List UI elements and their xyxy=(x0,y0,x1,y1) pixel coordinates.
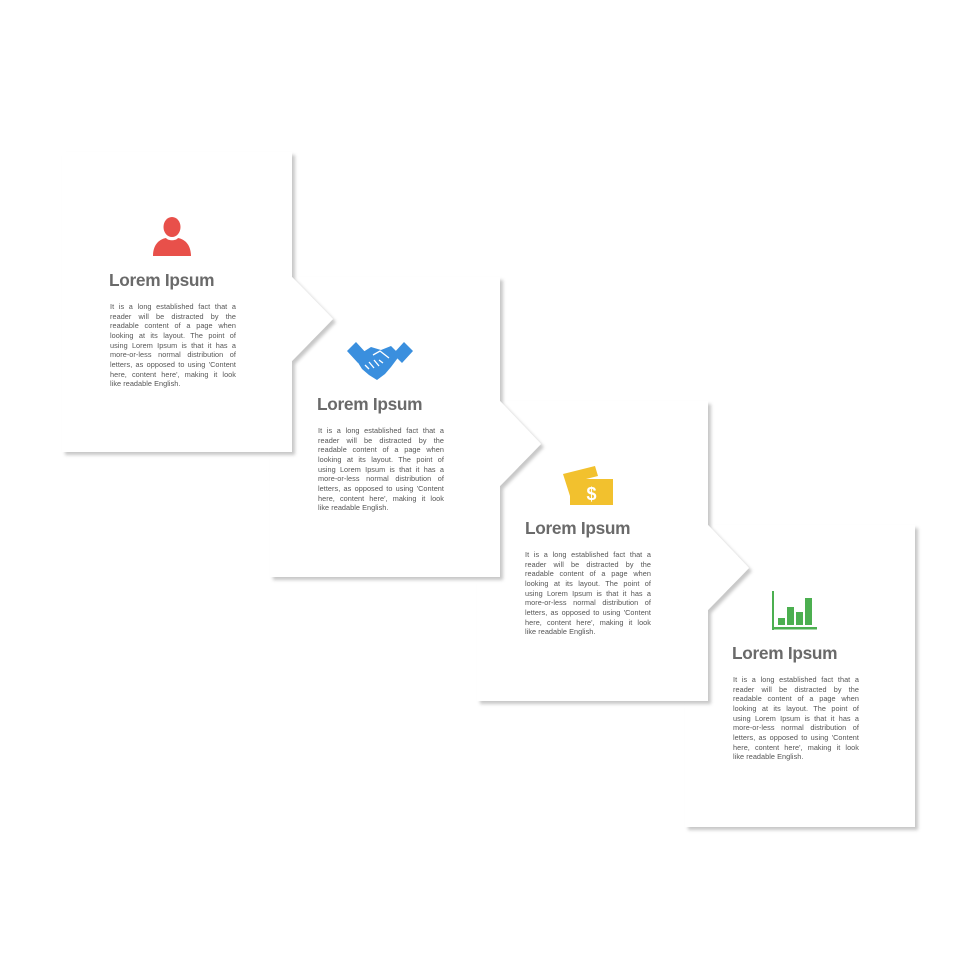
text 1: reader will be distracted by the xyxy=(110,312,236,321)
text 3: here, content here', making it look xyxy=(525,618,651,627)
text 4: It is a long established fact that a xyxy=(733,675,859,684)
panel 1 with arrow xyxy=(62,152,333,452)
text 4: reader will be distracted by the xyxy=(733,685,859,694)
icon: money: $ xyxy=(586,484,597,504)
text 2 xyxy=(318,426,444,512)
text 1 xyxy=(110,302,236,388)
text 2: looking at its layout. The point of xyxy=(318,455,444,464)
text 4: readable content of a page when xyxy=(733,694,859,703)
panel 3 with arrow xyxy=(477,401,749,701)
text 4: looking at its layout. The point of xyxy=(733,704,859,713)
text 1: It is a long established fact that a xyxy=(110,302,236,311)
title 3: Lorem Ipsum xyxy=(525,518,630,538)
icon: person xyxy=(153,217,191,256)
icon: handshake xyxy=(347,342,413,380)
text 1: readable content of a page when xyxy=(110,321,236,330)
text 1: more-or-less normal distribution of xyxy=(110,350,236,359)
text 1: like readable English. xyxy=(110,379,180,388)
text 3: more-or-less normal distribution of xyxy=(525,598,651,607)
text 3: using Lorem Ipsum is that it has a xyxy=(525,589,651,598)
text 2: more-or-less normal distribution of xyxy=(318,474,444,483)
icon: money xyxy=(563,466,613,505)
text 1: here, content here', making it look xyxy=(110,370,236,379)
text 3 xyxy=(525,550,651,636)
text 3: letters, as opposed to using 'Content xyxy=(525,608,651,617)
text 4: more-or-less normal distribution of xyxy=(733,723,859,732)
text 2: letters, as opposed to using 'Content xyxy=(318,484,444,493)
panel 4 xyxy=(685,525,915,827)
title 4: Lorem Ipsum xyxy=(732,643,837,663)
text 3: like readable English. xyxy=(525,627,595,636)
text 3: It is a long established fact that a xyxy=(525,550,651,559)
text 2: like readable English. xyxy=(318,503,388,512)
text 3: looking at its layout. The point of xyxy=(525,579,651,588)
text 2: readable content of a page when xyxy=(318,445,444,454)
text 2: using Lorem Ipsum is that it has a xyxy=(318,465,444,474)
text 4: using Lorem Ipsum is that it has a xyxy=(733,714,859,723)
text 1: using Lorem Ipsum is that it has a xyxy=(110,341,236,350)
text 1: letters, as opposed to using 'Content xyxy=(110,360,236,369)
text 3: reader will be distracted by the xyxy=(525,560,651,569)
text 3: readable content of a page when xyxy=(525,569,651,578)
icon: bar chart xyxy=(772,591,817,630)
text 2: here, content here', making it look xyxy=(318,494,444,503)
title 2: Lorem Ipsum xyxy=(317,394,422,414)
panel 2 with arrow xyxy=(270,277,541,577)
text 4 xyxy=(733,675,859,761)
text 2: It is a long established fact that a xyxy=(318,426,444,435)
text 4: letters, as opposed to using 'Content xyxy=(733,733,859,742)
text 4: like readable English. xyxy=(733,752,803,761)
text 2: reader will be distracted by the xyxy=(318,436,444,445)
text 4: here, content here', making it look xyxy=(733,743,859,752)
title 1: Lorem Ipsum xyxy=(109,270,214,290)
text 1: looking at its layout. The point of xyxy=(110,331,236,340)
